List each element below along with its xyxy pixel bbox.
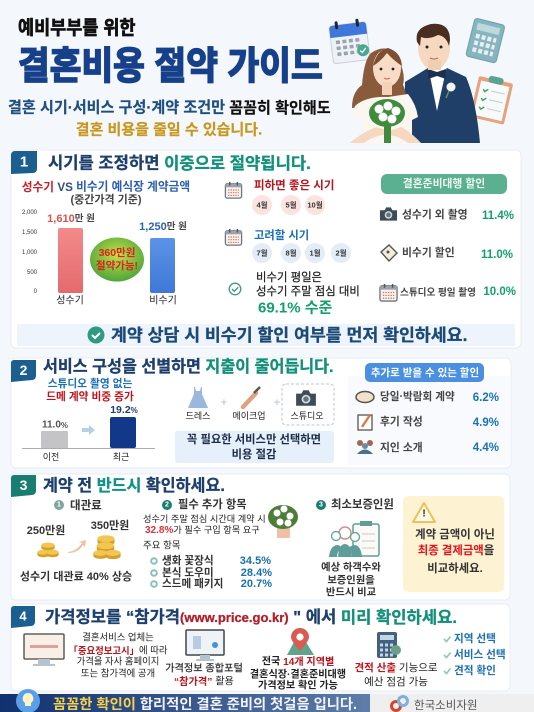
caption: guest count line 2: 보증인원을: [327, 574, 375, 586]
dashed studio box: 스튜디오: [290, 411, 324, 421]
section 4 badge: [11, 606, 35, 628]
row: outside peak shoot: [380, 207, 514, 222]
row: studio weekday: [380, 284, 516, 301]
month pills: avoid: 4월: [256, 200, 268, 210]
arrow up: [68, 540, 86, 553]
y axis labels: [22, 210, 38, 295]
header: [8, 18, 514, 143]
callout: choose essentials: [175, 431, 334, 463]
month pills: consider: [252, 243, 351, 263]
section 2 badge: 2: [20, 362, 28, 378]
icon: warning triangle: !: [422, 508, 426, 520]
heading: venue fee: 대관료: [70, 498, 102, 512]
icon: calendar avoid: [225, 182, 242, 198]
month pills: consider: 2월: [335, 248, 347, 258]
icon: makeup brush: [243, 387, 260, 407]
panel: section 4 price info: [11, 604, 510, 692]
item: helper: 28.4%: [241, 567, 272, 579]
section 1 badge: 1: [20, 154, 28, 170]
text: 32.8 percent: 32.8%가 필수 구입 항목 요구: [145, 524, 260, 536]
panel: section 1 timing: [11, 150, 521, 348]
row: review: 후기 작성: [380, 414, 423, 428]
callout: choose essentials: 비용 절감: [232, 448, 277, 461]
icon: small coins: [37, 542, 59, 557]
section 4 heading: 가격정보를 “참가격(www.price.go.kr) " 에서 미리 확인하세요.: [45, 608, 457, 626]
heading: required: 필수 추가 항목: [178, 497, 247, 511]
chart heading red: 드메 계약 비중 증가: [46, 390, 134, 403]
row: same-day expo contract: 당일·박람회 계약: [380, 390, 455, 403]
caption: 40 percent: 성수기 대관료 40% 상승: [20, 569, 132, 583]
text block: regions: 전국 14개 지역별: [262, 654, 334, 668]
panel: section 2 services: [11, 358, 511, 468]
panel: section 3 check before contract: [11, 474, 510, 600]
row: same-day expo contract: 6.2%: [473, 392, 499, 404]
icon: dress: [188, 387, 208, 408]
text block: estimate: 견적 산출 기능으로: [354, 661, 438, 674]
y axis labels: 500: [27, 270, 38, 276]
heading: avoid: 피하면 좋은 시기: [254, 178, 334, 192]
section 3 badge: [11, 475, 36, 497]
section 1 badge: [11, 151, 37, 174]
text: contract line: 성수기 주말 점심 시간대 계약 시: [143, 513, 266, 524]
row: referral: 4.4%: [473, 442, 499, 454]
row: off-season discount: [381, 245, 513, 261]
month pills: consider: 7월: [256, 248, 268, 258]
callout: warning: 비교하세요.: [427, 562, 483, 575]
item: package: 스드메 패키지: [162, 577, 223, 590]
number 2: 2: [165, 502, 169, 508]
row: off-season discount: 11.0%: [481, 249, 513, 261]
icon: clipboard: [470, 73, 514, 125]
value: peak season: 1,610만 원: [47, 212, 95, 225]
value: recent: 19.2%: [110, 404, 138, 416]
label: peak season: 성수기: [56, 294, 84, 306]
row: outside peak shoot: 11.4%: [482, 210, 514, 222]
number 2: [162, 500, 172, 510]
section 3 badge: 3: [20, 477, 28, 493]
text: 69.1 percent: 69.1% 수준: [258, 300, 332, 316]
month pills: consider: 8월: [285, 248, 297, 258]
value: off season: 1,250만 원: [139, 220, 187, 233]
text block: regions: 가격정보 확인 가능: [258, 678, 338, 692]
plus sign: +: [221, 397, 227, 409]
text block: regions: [250, 654, 346, 692]
callout: savings oval: [90, 238, 144, 282]
main title: 결혼비용 절약 가이드: [18, 45, 323, 87]
panel: planner discounts: [380, 174, 516, 301]
month pills: avoid: 10월: [307, 200, 323, 210]
section 2 heading: 서비스 구성을 선별하면 지출이 줄어듭니다.: [43, 358, 334, 376]
section 2 badge: [11, 360, 36, 382]
icon: calculator: [377, 632, 401, 658]
text: compared to peak: 성수기 주말 점심 대비: [256, 284, 360, 298]
bar: before: [41, 431, 68, 448]
y axis labels: 0: [34, 289, 38, 295]
checklist: 견적 확인: [454, 664, 496, 677]
label: dress: 드레스: [186, 411, 210, 421]
chart title: 성수기 VS 비수기 예식장 계약금액: [22, 180, 190, 194]
label: before: 이전: [43, 452, 59, 462]
text block: regions: 결혼식장·결혼준비대행: [250, 668, 346, 680]
logo mark: [392, 696, 408, 710]
text block: disclosure: 결혼서비스 업체는: [82, 632, 154, 642]
month pills: avoid: [252, 195, 325, 215]
footer banner: [0, 689, 534, 712]
section 3 heading: 계약 전 반드시 확인하세요.: [43, 477, 225, 495]
icon: calendar consider: [225, 229, 242, 245]
column: minimum guarantee: [316, 497, 394, 598]
row: referral: [357, 440, 499, 454]
y axis labels: 1,500: [22, 230, 38, 236]
item: package: 20.7%: [241, 578, 272, 590]
value: 250: 250만원: [27, 523, 65, 537]
icon: monitor 2: [186, 630, 224, 661]
panel: additional discounts: [348, 363, 510, 465]
panel: wedding hall price chart: [22, 180, 190, 306]
illustration: bride: [350, 48, 421, 143]
label: makeup: 메이크업: [232, 411, 266, 421]
value: before: 11.0%: [42, 420, 68, 430]
text: off-season weekday: 비수기 평일은: [256, 270, 322, 284]
icon: check: [229, 283, 241, 295]
icon: light bulb: [16, 689, 40, 712]
panel: deume contract chart: [22, 377, 155, 462]
icon: calculator: [466, 18, 505, 63]
heading: consider: 고려할 시기: [254, 228, 309, 242]
column: required add-ons: [143, 497, 298, 590]
subtitle line 2: 결혼 비용을 줄일 수 있습니다.: [76, 122, 262, 138]
section 1 heading: 시기를 조정하면 이중으로 절약됩니다.: [48, 154, 311, 172]
chart subtitle: (중간가격 기준): [70, 192, 142, 206]
bar: off season: [150, 238, 175, 293]
row: referral: 지인 소개: [380, 441, 423, 454]
month pills: consider: 1월: [309, 248, 321, 258]
callout: warning: 계약 금액이 아닌: [415, 527, 495, 541]
text block: disclosure: 또는 참가격에 공개: [81, 668, 155, 678]
y axis labels: 1,000: [22, 250, 38, 256]
text: key items: 주요 항목: [143, 540, 181, 552]
item: flowers: 생화 꽃장식: [162, 554, 214, 567]
caption: guest count line 1: 예상 하객수와: [321, 560, 381, 574]
checklist: 지역 선택: [454, 632, 496, 645]
text block: estimate: 예산 점검 가능: [364, 675, 428, 688]
callout band: [17, 324, 515, 346]
text block: disclosure: [68, 632, 168, 678]
callout: savings oval: 절약가능!: [96, 259, 138, 272]
text block: disclosure: 가격을 자사 홈페이지: [77, 656, 159, 666]
icon: guests and clipboard: [329, 521, 379, 557]
checklist: [444, 632, 506, 677]
row: outside peak shoot: 성수기 외 촬영: [402, 207, 468, 221]
row: studio weekday: 10.0%: [483, 286, 516, 298]
eyebrow title: 예비부부를 위한: [18, 18, 136, 38]
bar: peak season: [58, 228, 83, 293]
row: review: 4.9%: [473, 417, 499, 429]
icon: map pin: [287, 628, 314, 655]
row: off-season discount: 비수기 할인: [402, 245, 455, 259]
arrow: [82, 425, 95, 435]
text block: portal: [165, 662, 243, 688]
callout: warning: [403, 496, 504, 592]
y axis labels: 2,000: [22, 210, 38, 216]
pill heading: [365, 363, 484, 382]
number 1: 1: [57, 502, 61, 508]
callout: warning: 최종 결제금액을: [418, 543, 494, 557]
column: venue fee: [20, 498, 132, 583]
icon: large coins: [93, 535, 121, 559]
panel: recommended periods: [225, 178, 360, 316]
callout: savings oval: 360만원: [99, 246, 135, 259]
section 4 badge: 4: [19, 608, 27, 624]
row: review: [358, 414, 499, 430]
item: package: [151, 577, 272, 590]
text block: portal: 가격정보 종합포털: [165, 662, 243, 674]
caption: guest count line 3: 반드시 비교: [326, 586, 377, 598]
month pills: avoid: 5월: [285, 200, 297, 210]
chart heading blue: 스튜디오 촬영 없는: [48, 377, 132, 390]
plus sign: +: [274, 397, 280, 409]
bar: recent: [110, 417, 136, 448]
organization name: 한국소비자원: [414, 698, 477, 712]
text block: disclosure: 「중요정보고시」에 따라: [68, 644, 168, 656]
row: same-day expo contract: [356, 390, 499, 404]
callout: choose essentials: 꼭 필요한 서비스만 선택하면: [187, 432, 321, 446]
label: off season: 비수기: [149, 294, 177, 306]
icon: calendar: [328, 18, 370, 64]
item: helper: [151, 566, 272, 579]
number 3: 3: [319, 502, 323, 508]
item: flowers: [151, 554, 271, 567]
pill heading: 결혼준비대행 할인: [403, 176, 485, 190]
icon: flower basket: [268, 505, 298, 538]
subtitle line 1: 결혼 시기·서비스 구성·계약 조건만 꼼꼼히 확인해도: [8, 100, 331, 116]
callout band: 계약 상담 시 비수기 할인 여부를 먼저 확인하세요.: [111, 325, 467, 345]
panel: service components: [175, 384, 334, 463]
text block: portal: “참가격” 활용: [174, 674, 234, 688]
pill heading: 추가로 받을 수 있는 할인: [371, 366, 479, 379]
item: flowers: 34.5%: [240, 555, 271, 567]
item: helper: 본식 도우미: [162, 566, 214, 579]
label: recent: 최근: [113, 452, 129, 462]
checklist: 서비스 선택: [454, 648, 506, 661]
illustration: groom: [405, 24, 480, 143]
heading: minimum guarantee: 최소보증인원: [331, 497, 394, 511]
value: 350: 350만원: [91, 518, 129, 532]
text block: estimate: [354, 661, 438, 688]
icon: monitor 1: [24, 634, 64, 666]
dashed studio box: [282, 384, 334, 425]
row: studio weekday: 스튜디오 평일 촬영: [400, 286, 476, 298]
